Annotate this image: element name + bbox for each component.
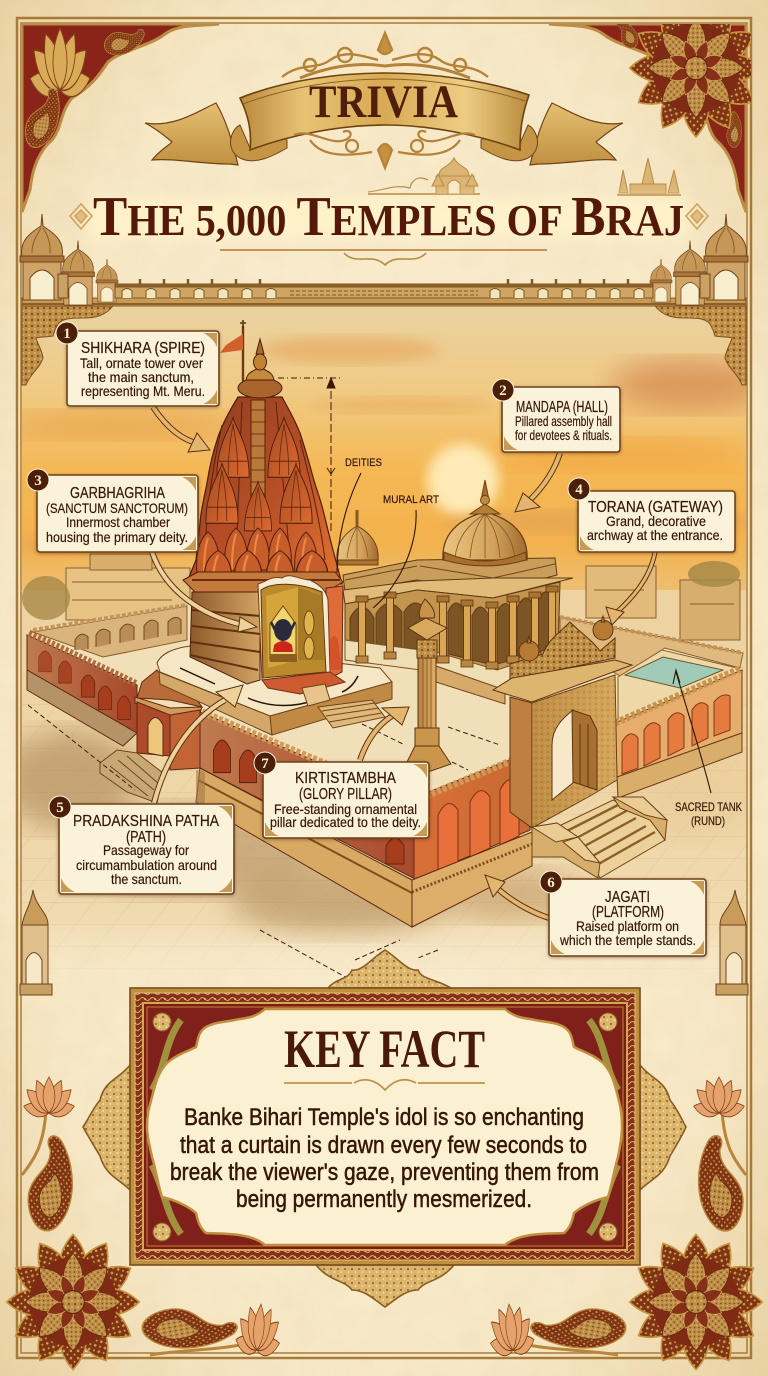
- key fact body text: Banke Bihari Temple's idol is so enchanting: [184, 1104, 584, 1131]
- key fact bottom crown: [316, 1265, 454, 1307]
- banner: [145, 73, 623, 165]
- label: sacred tank: (RUND): [691, 814, 725, 828]
- callout 4: torana: archway at the entrance.: [587, 527, 723, 543]
- arrow 1: [153, 407, 210, 452]
- kirtistambha pillar: [406, 599, 451, 772]
- ornament below banner: [294, 131, 475, 168]
- shikhara tower: [183, 320, 345, 706]
- front-right wall with base: [412, 752, 532, 927]
- courtyard floor: [33, 605, 743, 810]
- key fact body text: that a curtain is drawn every few seconds to: [180, 1132, 587, 1159]
- panel corner ornament left: [22, 306, 113, 385]
- callout 7: kirtistambha: KIRTISTAMBHA: [295, 770, 396, 787]
- small temple silhouette centre: [368, 158, 480, 194]
- title glow: [88, 198, 688, 238]
- banner title: TRIVIA: [309, 76, 458, 128]
- side tower right: [716, 890, 748, 995]
- dashed ground arrows: [28, 705, 500, 985]
- callout 1: shikhara: SHIKHARA (SPIRE): [81, 340, 205, 357]
- callout 6: jagati: [540, 871, 706, 956]
- callout 2: mandapa: MANDAPA (HALL): [516, 399, 608, 416]
- paisley side: [25, 88, 60, 148]
- callout 1: shikhara: Tall, ornate tower over: [80, 355, 203, 371]
- arrow 7: [360, 707, 409, 760]
- callout 6: jagati: which the temple stands.: [559, 932, 696, 948]
- large dome: [443, 480, 527, 566]
- leader: deities: [337, 473, 361, 573]
- skyline left: [20, 214, 118, 305]
- side tower left: [20, 890, 52, 995]
- callout 2: mandapa: Pillared assembly hall: [515, 413, 612, 429]
- main title: THE 5,000 TEMPLES OF BRAJ: [93, 186, 684, 248]
- diamond ornaments: [70, 204, 708, 229]
- key fact body text: break the viewer's gaze, preventing them from: [170, 1159, 599, 1186]
- arrow 3: [152, 552, 257, 632]
- background buildings: [22, 554, 740, 640]
- callout 5: pradakshina patha: (PATH): [126, 829, 166, 846]
- callout 2: mandapa: for devotees & rituals.: [515, 427, 612, 443]
- heading divider: [284, 1080, 485, 1090]
- label: mural art: MURAL ART: [383, 494, 439, 506]
- callout 5: pradakshina patha: 5: [56, 800, 64, 816]
- callout 6: jagati: Raised platform on: [576, 918, 679, 934]
- callout 1: shikhara: [56, 322, 219, 406]
- leader: mural art: [373, 510, 416, 608]
- top ornament above banner: [282, 33, 488, 78]
- gateway crest: [510, 622, 615, 680]
- callout 5: pradakshina patha: Passageway for: [103, 842, 189, 858]
- key fact body text: [170, 1104, 599, 1213]
- right stairs: [532, 797, 667, 878]
- callout 2: mandapa: 2: [499, 383, 507, 399]
- peacock corners: [152, 1020, 618, 1234]
- callout 7: kirtistambha: [254, 752, 429, 838]
- callout 1: shikhara: the main sanctum,: [88, 369, 194, 385]
- mandala icon: [628, 24, 751, 138]
- finial: [238, 339, 282, 398]
- callout 3: garbhagriha: GARBHAGRIHA: [70, 485, 165, 502]
- arrow 2: [515, 453, 560, 512]
- label: sacred tank: SACRED TANK: [675, 800, 742, 814]
- callout 4: torana: Grand, decorative: [606, 513, 706, 529]
- sanctum cutaway: [258, 576, 345, 706]
- key fact panel: [130, 988, 640, 1265]
- left stairs: [100, 750, 163, 803]
- callout 1: shikhara: 1: [63, 326, 71, 342]
- callout 7: kirtistambha: (GLORY PILLAR): [299, 786, 392, 803]
- top-left corner ornament: [22, 17, 219, 212]
- callout 3: garbhagriha: Innermost chamber: [66, 514, 170, 530]
- mandapa hall: [343, 558, 573, 704]
- arrow 4: [606, 552, 655, 625]
- key fact top crown: [328, 950, 451, 988]
- callout 6: jagati: (PLATFORM): [592, 904, 664, 921]
- label: deities: DEITIES: [345, 457, 382, 469]
- callout 6: jagati: 6: [547, 875, 555, 891]
- sacred tank and right wall: [615, 650, 742, 798]
- small dome: [337, 510, 378, 565]
- flag: [220, 320, 246, 384]
- callout 3: garbhagriha: (SANCTUM SANCTORUM): [46, 500, 188, 516]
- callout 5: pradakshina patha: the sanctum.: [111, 871, 182, 887]
- callout 3: garbhagriha: 3: [34, 473, 42, 489]
- leader: sacred tank: [673, 670, 711, 793]
- small temple silhouette right: [617, 158, 681, 195]
- callout 3: garbhagriha: [27, 469, 198, 552]
- sky and ground wash: [0, 304, 768, 990]
- header divider band: [22, 298, 746, 306]
- paisley top: [104, 29, 145, 56]
- illustration panel: temple scene: [0, 304, 768, 990]
- arrow 6: [485, 875, 549, 918]
- panel corner ornament right: [655, 306, 746, 385]
- circumambulation arrows: [180, 668, 358, 706]
- skyline wall: [115, 279, 653, 298]
- callout 3: garbhagriha: housing the primary deity.: [46, 529, 188, 545]
- back wall right with scallops: [560, 617, 743, 676]
- callout 5: pradakshina patha: PRADAKSHINA PATHA: [73, 813, 219, 830]
- plinth stairs: [318, 700, 385, 728]
- bottom-left floral ornament: [7, 1077, 284, 1370]
- banner tails: [145, 103, 623, 165]
- small gate on left wall: [135, 670, 202, 770]
- callout 6: jagati: JAGATI: [605, 889, 650, 906]
- skyline right: [650, 214, 748, 305]
- callout 4: torana: TORANA (GATEWAY): [588, 499, 723, 516]
- label: sacred tank: [675, 800, 742, 828]
- callout 1: shikhara: representing Mt. Meru.: [81, 383, 205, 399]
- callout 4: torana: [568, 478, 735, 552]
- callout 5: pradakshina patha: [49, 796, 234, 894]
- title underline: [220, 250, 547, 265]
- eave and base: [183, 572, 343, 592]
- temple plinth: [157, 646, 392, 735]
- back wall: scalloped with arches: [33, 605, 187, 657]
- lotus icon gold: [29, 28, 91, 101]
- torana gateway: [493, 616, 632, 830]
- callout 4: torana: 4: [575, 482, 583, 498]
- key fact body text: being permanently mesmerized.: [236, 1186, 532, 1213]
- callout 7: kirtistambha: 7: [261, 756, 269, 772]
- left outer wall: [27, 633, 137, 746]
- bottom-right floral ornament: [486, 1077, 762, 1370]
- height dimension line: [278, 378, 340, 533]
- callout 2: mandapa: [492, 379, 620, 452]
- key fact heading: KEY FACT: [284, 1019, 485, 1079]
- callout 7: kirtistambha: pillar dedicated to the deity.: [270, 814, 421, 830]
- callout 7: kirtistambha: Free-standing ornamental: [274, 801, 417, 817]
- top-right corner ornament: [548, 24, 751, 212]
- corner flowers: [153, 1013, 617, 1241]
- arrow 5: [154, 685, 243, 803]
- front-left wall with base: [196, 712, 426, 927]
- callout 5: pradakshina patha: circumambulation around: [76, 857, 217, 873]
- key fact right medallion: [640, 1065, 686, 1190]
- key fact left medallion: [83, 1065, 130, 1190]
